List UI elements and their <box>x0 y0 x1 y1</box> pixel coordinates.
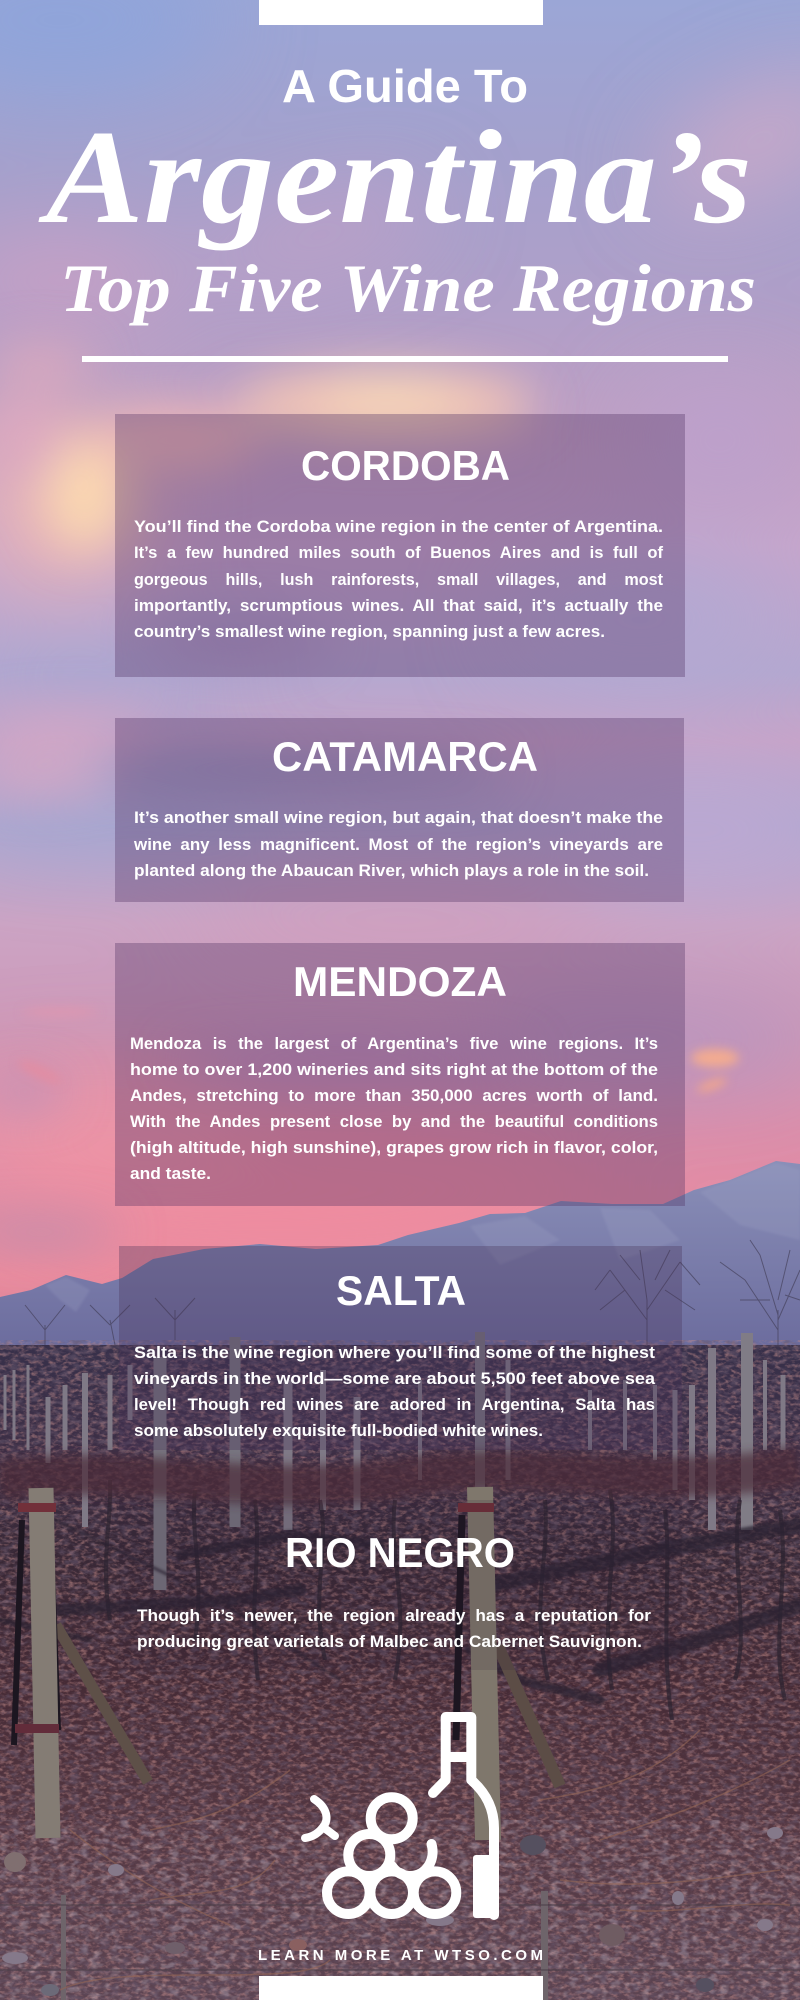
heading: Mendoza: MENDOZA <box>293 958 507 1005</box>
body: Cordoba: gorgeous hills, lush rainforests, small villages, and most <box>134 570 663 589</box>
body: Cordoba: You’ll find the Cordoba wine region in the center of Argentina. <box>134 517 663 536</box>
body: Salta: some absolutely exquisite full-bodied white wines. <box>134 1421 543 1440</box>
panel: Catamarca <box>115 718 684 902</box>
body: Salta: vineyards in the world—some are about 5,500 feet above sea <box>134 1369 656 1388</box>
body: Rio Negro <box>137 1606 651 1651</box>
panel: Salta <box>119 1246 682 1450</box>
heading: Salta: SALTA <box>336 1267 466 1314</box>
far vineyard posts <box>5 1332 783 1590</box>
dry canes and stones on the ground <box>2 1730 790 1996</box>
body: Catamarca <box>133 808 663 880</box>
trees on the horizon <box>25 1240 800 1362</box>
subtitle: A Guide To: A Guide To <box>282 60 528 112</box>
panel: Cordoba <box>115 414 685 677</box>
body: Mendoza: home to over 1,200 wineries and sits right at the bottom of the <box>130 1060 658 1079</box>
body: Cordoba: importantly, scrumptious wines. All that said, it’s actually the <box>134 596 663 615</box>
top white tab <box>259 0 543 25</box>
body: Cordoba: It’s a few hundred miles south of Buenos Aires and is full of <box>134 543 663 562</box>
body: Catamarca: wine any less magnificent. Most of the region’s vineyards are <box>133 835 663 854</box>
heading: Cordoba: CORDOBA <box>301 442 510 489</box>
icon: wine bottle and grapes <box>305 1717 499 1918</box>
body: Rio Negro: Though it’s newer, the region already has a reputation for <box>137 1606 651 1625</box>
title block <box>38 60 756 326</box>
title rule <box>82 356 728 362</box>
body: Cordoba: country’s smallest wine region, spanning just a few acres. <box>134 622 605 641</box>
body: Catamarca: It’s another small wine region, but again, that doesn’t make the <box>134 808 663 827</box>
heading: Rio Negro: RIO NEGRO <box>285 1529 515 1576</box>
body: Salta <box>134 1343 656 1440</box>
vine row <box>106 1480 785 1720</box>
body: Mendoza: Mendoza is the largest of Argentina’s five wine regions. It’s <box>130 1034 658 1053</box>
body: Salta: level! Though red wines are adored in Argentina, Salta has <box>134 1395 655 1414</box>
icon: grape cluster <box>305 1797 456 1914</box>
title: Top Five Wine Regions: Top Five Wine Regions <box>60 250 756 326</box>
body: Mendoza: and taste. <box>130 1164 211 1183</box>
body: Catamarca: planted along the Abaucan River, which plays a role in the soil. <box>134 861 649 880</box>
dark net bands <box>0 1520 800 1700</box>
panel: Rio Negro <box>119 1500 682 1670</box>
icon: wine bottle <box>433 1717 499 1918</box>
body: Mendoza: With the Andes present close by and the beautiful conditions <box>130 1112 658 1131</box>
body: Cordoba <box>134 517 663 641</box>
heading: Catamarca: CATAMARCA <box>272 733 538 780</box>
footer call to action: LEARN MORE AT WTSO.COM <box>258 1947 543 1964</box>
body: Mendoza: (high altitude, high sunshine), grapes grow rich in flavor, color, <box>130 1138 658 1157</box>
title: Argentina's: Argentina’s <box>38 103 752 251</box>
body: Mendoza <box>130 1034 658 1183</box>
body: Rio Negro: producing great varietals of Malbec and Cabernet Sauvignon. <box>137 1632 642 1651</box>
large foreground posts <box>0 1487 800 2000</box>
panel: Mendoza <box>115 943 685 1206</box>
body: Salta: Salta is the wine region where you’ll find some of the highest <box>134 1343 655 1362</box>
bottom white tab <box>259 1976 543 2000</box>
body: Mendoza: Andes, stretching to more than 350,000 acres worth of land. <box>130 1086 658 1105</box>
